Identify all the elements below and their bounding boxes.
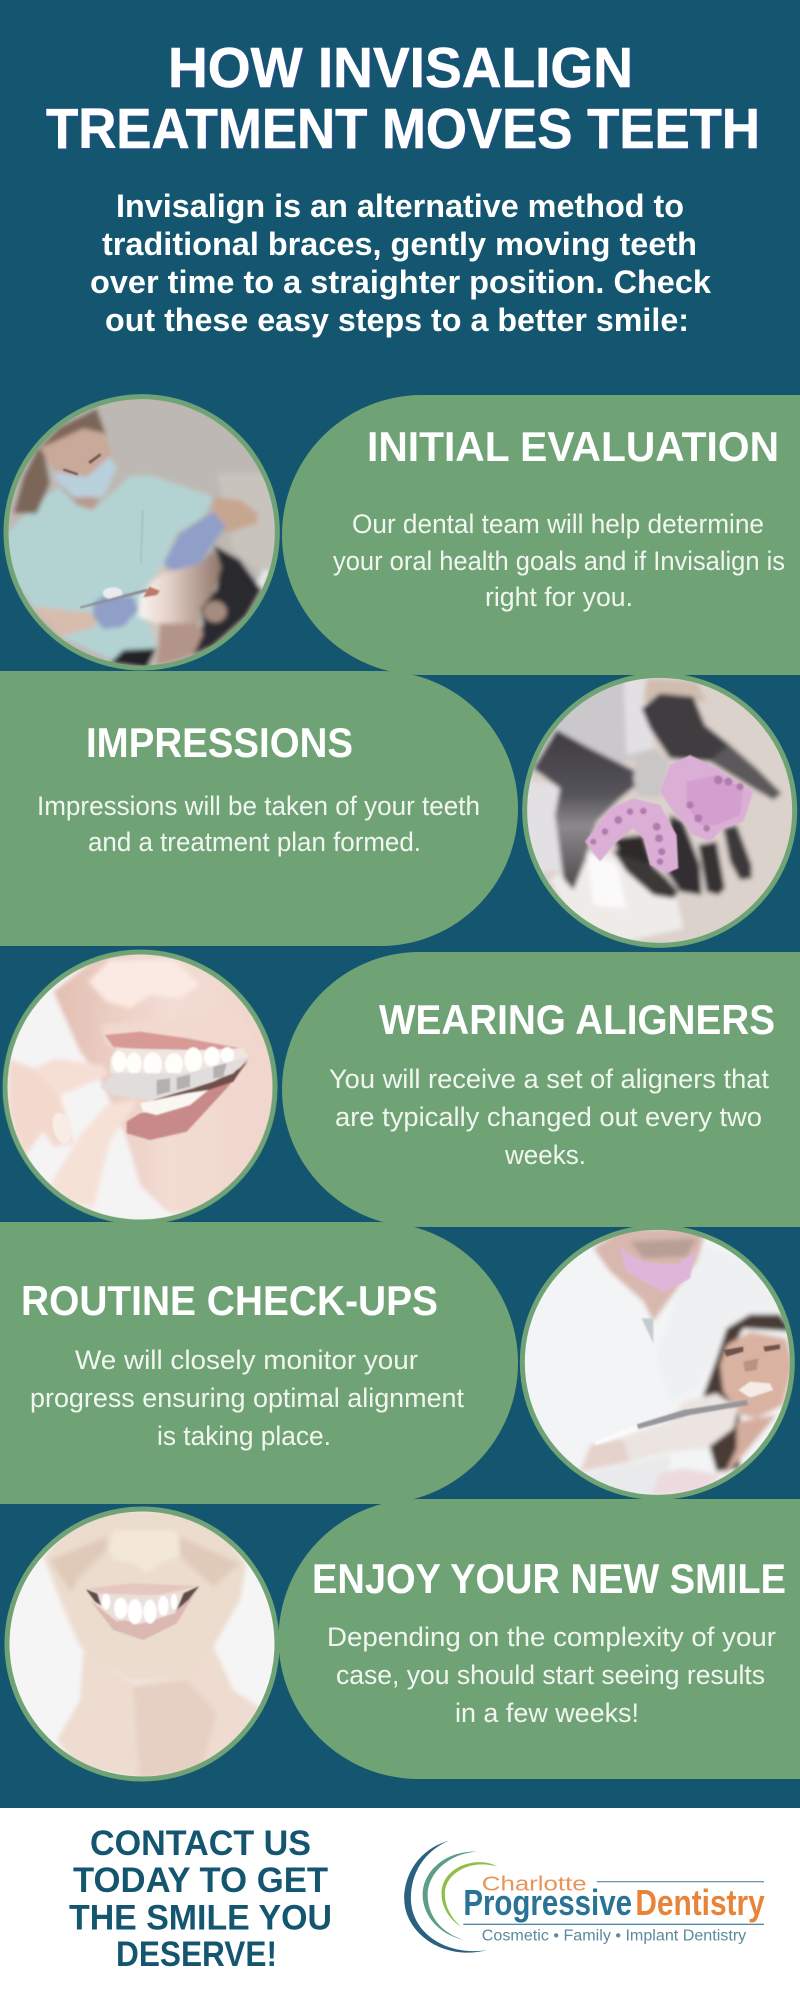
body: routine check-ups [30, 1345, 465, 1451]
logo: Charlotte Progressive Dentistry [404, 1841, 765, 1953]
logo word: Progressive: Progressive [463, 1882, 632, 1923]
body: initial evaluation: your oral health goals and if Invisalign is [333, 546, 785, 576]
body: impressions: Impressions will be taken of your teeth [37, 791, 480, 821]
heading: wearing aligners: WEARING ALIGNERS [379, 996, 775, 1043]
intro text: Invisalign is an alternative method to [116, 188, 684, 224]
body: routine check-ups: We will closely monitor your [75, 1345, 418, 1375]
body: wearing aligners: are typically changed out every two [335, 1102, 762, 1132]
logo word: Charlotte: Charlotte [482, 1873, 587, 1896]
heading: routine check-ups: ROUTINE CHECK-UPS [21, 1277, 438, 1324]
body: initial evaluation: right for you. [485, 582, 633, 612]
body: enjoy your new smile: Depending on the complexity of your [327, 1622, 776, 1652]
panel: routine check-ups [0, 1222, 518, 1504]
title: HOW INVISALIGN [168, 36, 633, 100]
heading: impressions: IMPRESSIONS [86, 719, 353, 766]
logo tagline: Cosmetic • Family • Implant Dentistry [482, 1927, 747, 1944]
call to action: CONTACT US [90, 1824, 311, 1863]
body: wearing aligners: You will receive a set of aligners that [329, 1064, 770, 1094]
intro text [90, 188, 712, 338]
intro text: traditional braces, gently moving teeth [102, 226, 697, 262]
photo: close-up of smile [4, 1506, 280, 1782]
photo: gloved hands holding dental impressions [522, 675, 798, 948]
body: initial evaluation: Our dental team will help determine [352, 509, 764, 539]
intro text: out these easy steps to a better smile: [105, 302, 689, 338]
panel: impressions [0, 671, 518, 946]
panel: initial evaluation [282, 395, 800, 675]
body: initial evaluation [333, 509, 785, 612]
heading: initial evaluation: INITIAL EVALUATION [367, 423, 779, 470]
panel: wearing aligners [282, 952, 800, 1227]
call to action: THE SMILE YOU [69, 1898, 332, 1938]
call to action: DESERVE! [116, 1935, 277, 1974]
body: wearing aligners [329, 1064, 770, 1170]
logo word: Dentistry: Dentistry [635, 1882, 765, 1923]
photo: dentist examining patient [0, 390, 290, 680]
intro text: over time to a straighter position. Check [90, 264, 712, 300]
body: routine check-ups: progress ensuring optimal alignment [30, 1383, 465, 1413]
body: enjoy your new smile: case, you should start seeing results [336, 1660, 765, 1690]
title: TREATMENT MOVES TEETH [46, 97, 760, 161]
photo: dentist treating smiling patient [520, 1227, 795, 1499]
body: impressions [37, 791, 480, 857]
panel: enjoy your new smile [278, 1499, 800, 1779]
title [46, 36, 760, 161]
body: enjoy your new smile: in a few weeks! [455, 1698, 639, 1728]
body: routine check-ups: is taking place. [157, 1421, 331, 1451]
body: enjoy your new smile [327, 1622, 776, 1728]
call to action: TODAY TO GET [73, 1861, 328, 1900]
photo: hand placing clear aligner on teeth [2, 950, 278, 1222]
white footer background [0, 1808, 800, 2000]
logo arcs [404, 1841, 498, 1953]
body: wearing aligners: weeks. [504, 1140, 586, 1170]
body: impressions: and a treatment plan formed. [88, 827, 421, 857]
call to action [69, 1824, 332, 1974]
